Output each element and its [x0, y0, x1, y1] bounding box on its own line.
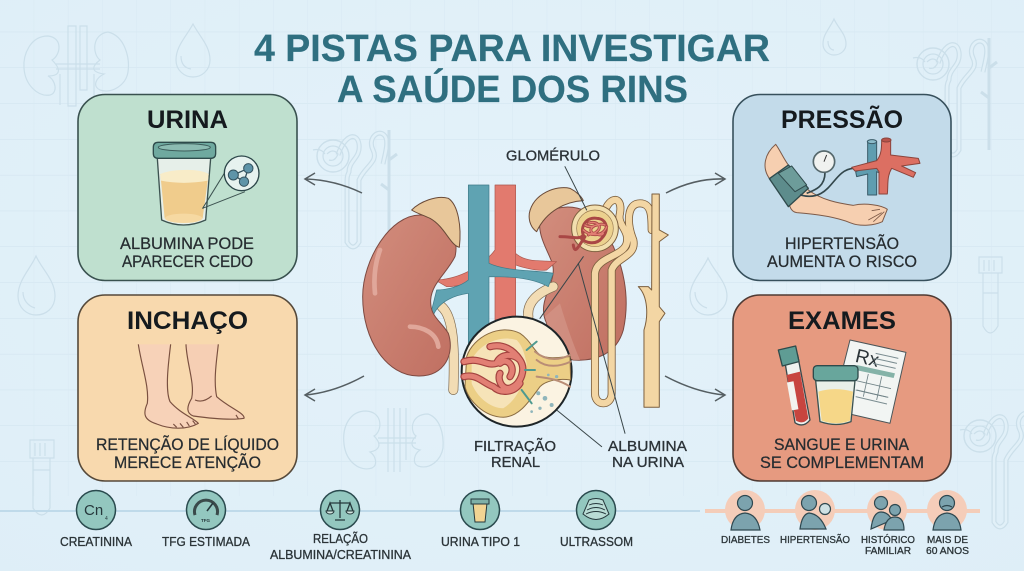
- text: retencao de liquido merece atencao: [96, 435, 279, 472]
- text: hipertensao aumenta o risco: HIPERTENSÃO: [785, 234, 899, 253]
- label: mais de 60 anos: [926, 534, 969, 557]
- icon: urine cup: [460, 490, 500, 530]
- text: albumina pode aparecer cedo: ALBUMINA PODE: [120, 234, 254, 253]
- text: hipertensao aumenta o risco: AUMENTA O RISCO: [767, 252, 917, 271]
- icon: scale: [320, 490, 360, 530]
- left kidney: [363, 215, 456, 376]
- icon: hipertensao person: [795, 490, 835, 530]
- text: albumina pode aparecer cedo: [120, 234, 254, 271]
- label: relacao albumina creatinina: ALBUMINA/CREATININA: [270, 548, 412, 562]
- panel: inchaco: [78, 295, 297, 481]
- leader lines: [540, 167, 625, 447]
- label: creatinina: CREATININA: [60, 535, 133, 549]
- arrow: to urina: [305, 173, 362, 193]
- label: tfg estimada: TFG ESTIMADA: [162, 535, 251, 549]
- label: historico familiar: FAMILIAR: [865, 545, 911, 557]
- exams timeline: [0, 490, 700, 562]
- icon: blood tube, urine cup and prescription: Rx: [853, 346, 881, 372]
- icon: historico familiar people: [867, 490, 907, 530]
- heading: exames: EXAMES: [788, 307, 896, 335]
- vein: [432, 185, 553, 343]
- adrenal glands: [412, 197, 460, 247]
- label: glomerulo: GLOMÉRULO: [506, 148, 600, 164]
- icon: tfg gauge: TFG: [201, 518, 210, 523]
- icon: creatinina: [76, 490, 116, 530]
- nephron tubule: [595, 200, 652, 403]
- icon: diabetes person: [725, 490, 765, 530]
- label: filtracao renal: RENAL: [491, 455, 540, 471]
- text: retencao de liquido merece atencao: RETENÇÃO DE LÍQUIDO: [96, 435, 279, 454]
- label: historico familiar: HISTÓRICO: [861, 533, 915, 546]
- text: sangue e urina se complementam: [760, 435, 924, 472]
- icon: arm with blood pressure cuff and vessels: [765, 138, 920, 225]
- label: mais de 60 anos: MAIS DE: [927, 534, 968, 546]
- heading: urina: URINA: [147, 106, 228, 134]
- icon: tfg gauge: [186, 490, 226, 530]
- text: hipertensao aumenta o risco: [767, 234, 917, 271]
- text: albumina pode aparecer cedo: APARECER CEDO: [122, 252, 253, 271]
- text: retencao de liquido merece atencao: MERECE ATENÇÃO: [114, 453, 261, 472]
- icon: swollen feet: [138, 344, 244, 428]
- label: filtracao renal: FILTRAÇÃO: [474, 438, 556, 455]
- label: historico familiar: [861, 533, 915, 557]
- icon: ultrasound: [576, 490, 616, 530]
- icon: blood tube, urine cup and prescription: [778, 340, 906, 425]
- ureters: [442, 287, 553, 390]
- title: 4 PISTAS PARA INVESTIGAR: [254, 28, 770, 70]
- heading: inchaco: INCHAÇO: [127, 307, 248, 335]
- heading: pressao: PRESSÃO: [781, 104, 903, 134]
- icon: creatinina: Cn: [84, 502, 103, 519]
- glomerulus: [572, 205, 618, 252]
- title: A SAÚDE DOS RINS: [337, 67, 688, 111]
- central kidney illustration: [363, 167, 668, 447]
- icon: urine cup with albumin molecules: [153, 142, 259, 225]
- risk factors timeline: [705, 490, 980, 557]
- label: relacao albumina creatinina: RELAÇÃO: [313, 532, 368, 546]
- panel: pressao: [733, 94, 951, 280]
- label: albumina na urina: [608, 439, 687, 471]
- right kidney: [540, 207, 626, 360]
- icon: mais de 60 anos person: [927, 490, 967, 530]
- label: albumina na urina: ALBUMINA: [608, 439, 687, 455]
- text: sangue e urina se complementam: SE COMPLEMENTAM: [760, 453, 924, 472]
- label: filtracao renal: [474, 438, 556, 471]
- artery: [435, 185, 557, 320]
- collecting duct: [638, 194, 668, 407]
- title: [254, 28, 770, 111]
- label: mais de 60 anos: 60 ANOS: [926, 545, 969, 557]
- arrow: to pressao: [666, 173, 725, 193]
- panel: exames: [733, 295, 951, 481]
- arrow: to inchaco: [305, 376, 364, 401]
- arrow: to exames: [665, 376, 725, 401]
- label: urina tipo 1: URINA TIPO 1: [441, 535, 520, 549]
- label: albumina na urina: NA URINA: [612, 455, 684, 471]
- label: ultrassom: ULTRASSOM: [560, 535, 633, 549]
- text: sangue e urina se complementam: SANGUE E URINA: [774, 435, 910, 454]
- inset circle: [462, 317, 572, 427]
- label: relacao albumina creatinina: [270, 532, 412, 562]
- panel: urina: [78, 94, 297, 280]
- label: diabetes: DIABETES: [721, 534, 770, 546]
- label: hipertensao: HIPERTENSÃO: [780, 533, 850, 546]
- icon: creatinina: 4: [105, 516, 108, 522]
